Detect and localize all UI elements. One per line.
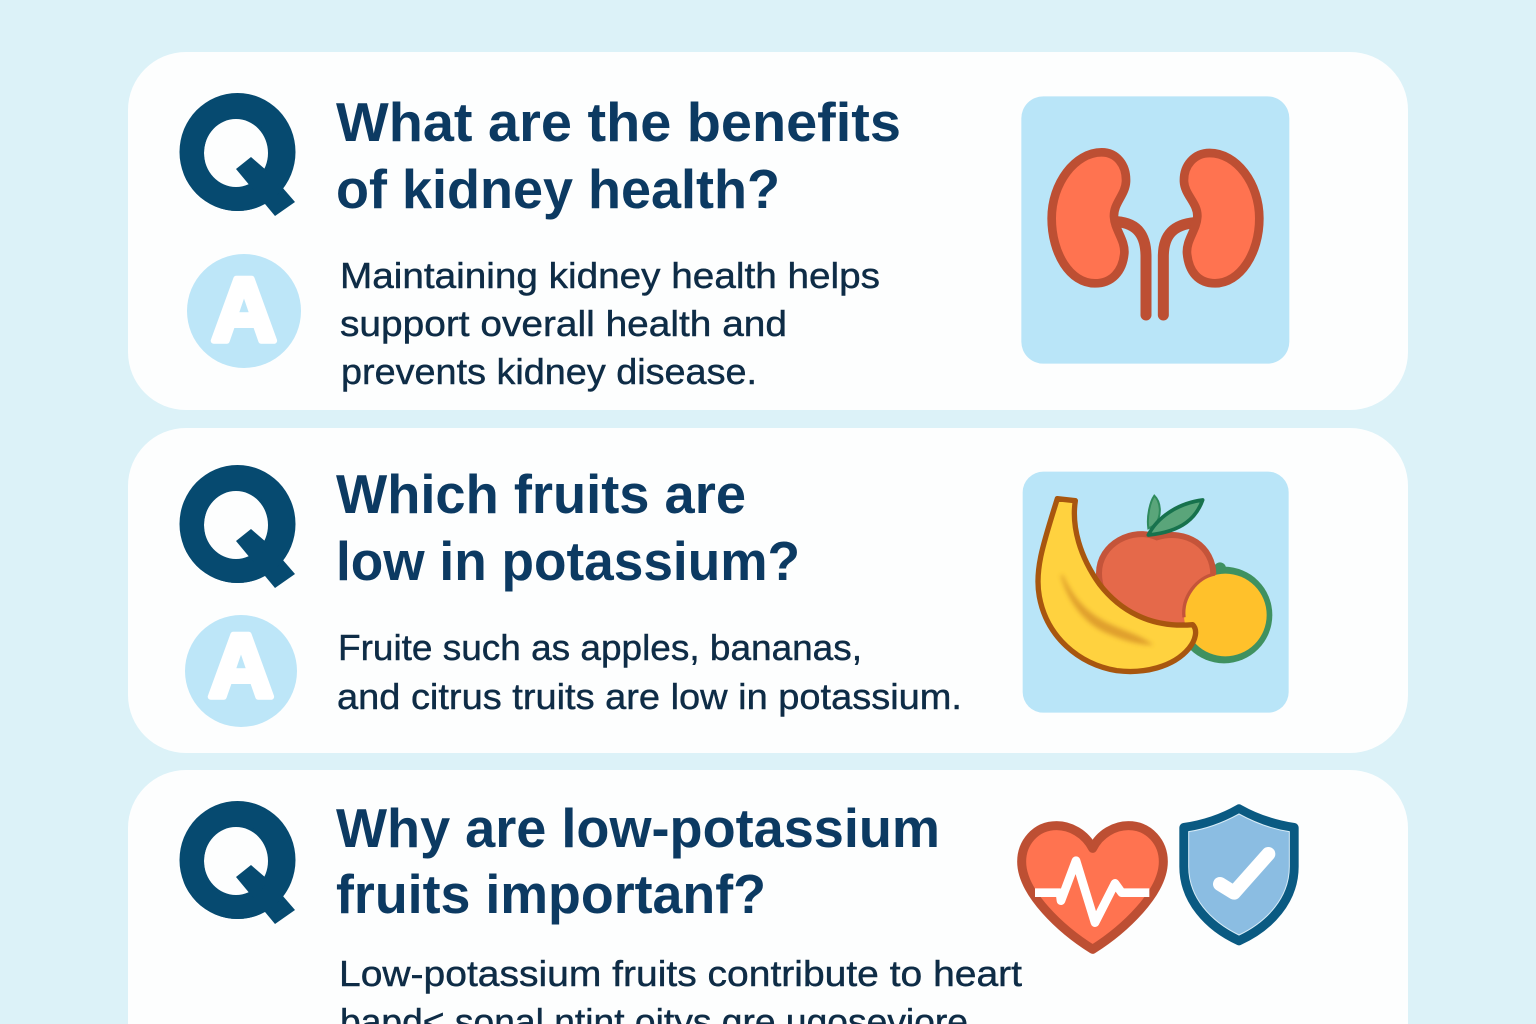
heading: benefits of kidney health: of kidney health? <box>336 158 780 220</box>
Q badge <box>180 801 296 924</box>
Q badge: Q <box>175 773 299 952</box>
icon: fruits <box>1023 472 1289 713</box>
answer text: support overall health and <box>340 303 787 344</box>
Q badge: Q <box>175 437 299 616</box>
panel: why low potassium fruits matter <box>128 770 1408 1024</box>
answer text: prevents kidney disease. <box>341 351 757 392</box>
heading: why important: Why are low-potassium <box>336 797 940 859</box>
Q badge <box>180 93 296 216</box>
answer text: Fruite such as apples, bananas, <box>338 627 862 668</box>
answer text <box>339 953 1022 1024</box>
icon: shield with check <box>1184 809 1294 941</box>
heading: low potassium fruits: low in potassium? <box>336 530 800 592</box>
Q badge: Q <box>175 65 299 244</box>
answer text <box>337 627 962 717</box>
A badge: A <box>208 617 274 717</box>
answer text: Maintaining kidney health helps <box>340 255 880 296</box>
icon: heart with pulse <box>1022 826 1163 949</box>
panel: kidney health benefits <box>128 52 1408 410</box>
heading: why important: fruits importanf? <box>336 863 766 925</box>
heading: low potassium fruits <box>336 463 800 592</box>
heading: low potassium fruits: Which fruits are <box>336 463 746 525</box>
A badge: A <box>212 261 276 361</box>
panel: low potassium fruits <box>128 428 1408 753</box>
A badge <box>187 254 301 368</box>
A badge <box>185 615 297 727</box>
heading: benefits of kidney health <box>336 91 901 220</box>
heading: why important <box>336 797 940 925</box>
heading: benefits of kidney health: What are the benefits <box>336 91 901 153</box>
answer text <box>340 255 880 392</box>
Q badge <box>180 465 296 588</box>
answer text: and citrus truits are low in potassium. <box>337 676 962 717</box>
icon: kidneys <box>1021 96 1289 364</box>
answer text: Low-potassium fruits contribute to heart <box>339 953 1022 994</box>
